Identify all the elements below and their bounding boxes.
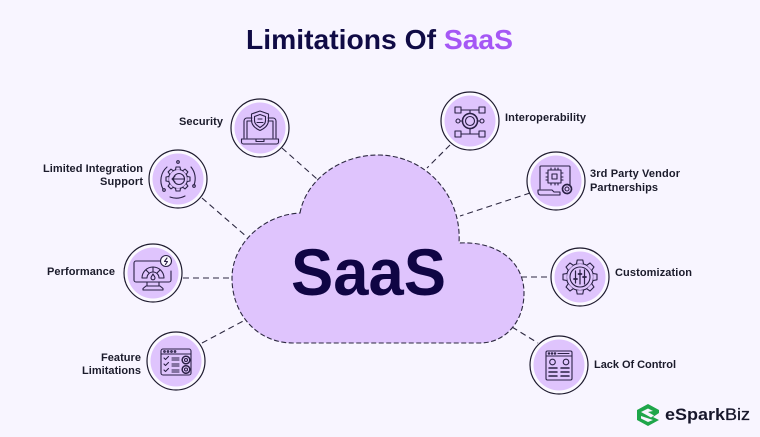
item: Interoperability [441,92,587,150]
icon: control panel window [546,351,572,380]
item: Performance: Performance [47,266,115,278]
icon: connected gear nodes [455,107,485,137]
icon: checklist window [161,349,191,375]
item: Feature Limitations: Feature [101,352,141,364]
item: Customization: Customization [615,267,692,279]
logo: eSparkBiz [637,404,750,426]
central cloud [232,155,524,343]
title: Limitations Of SaaS [246,24,513,55]
icon: gear with sliders [563,260,597,294]
item: Feature Limitations [82,332,205,390]
item: Lack Of Control: Lack Of Control [594,359,676,371]
icon: gear with arrow [161,161,195,198]
connector lines [183,145,551,343]
icon: green hexagon mark [637,404,659,426]
item: Limited Integration Support: Support [100,176,143,188]
logo: eSparkBiz: eSparkBiz [665,405,750,424]
item: Security: Security [179,116,224,128]
cloud label: SaaS [291,235,446,309]
item: Customization [551,248,692,306]
item: Performance [47,244,182,302]
item: Feature Limitations: Limitations [82,365,141,377]
icon: speed gauge monitor [134,256,172,290]
item: Security [179,99,289,157]
item: Limited Integration Support [43,150,207,208]
item: Interoperability: Interoperability [505,112,587,124]
item: 3rd Party Vendor Partnerships: Partnerships [590,182,658,194]
item: 3rd Party Vendor Partnerships: 3rd Party Vendor [590,168,681,180]
item: 3rd Party Vendor Partnerships [527,152,681,210]
item: Limited Integration Support: Limited Integration [43,163,143,175]
icon: laptop chip and gear [538,166,572,195]
icon: shield laptop [242,111,278,144]
item: Lack Of Control [530,336,676,394]
